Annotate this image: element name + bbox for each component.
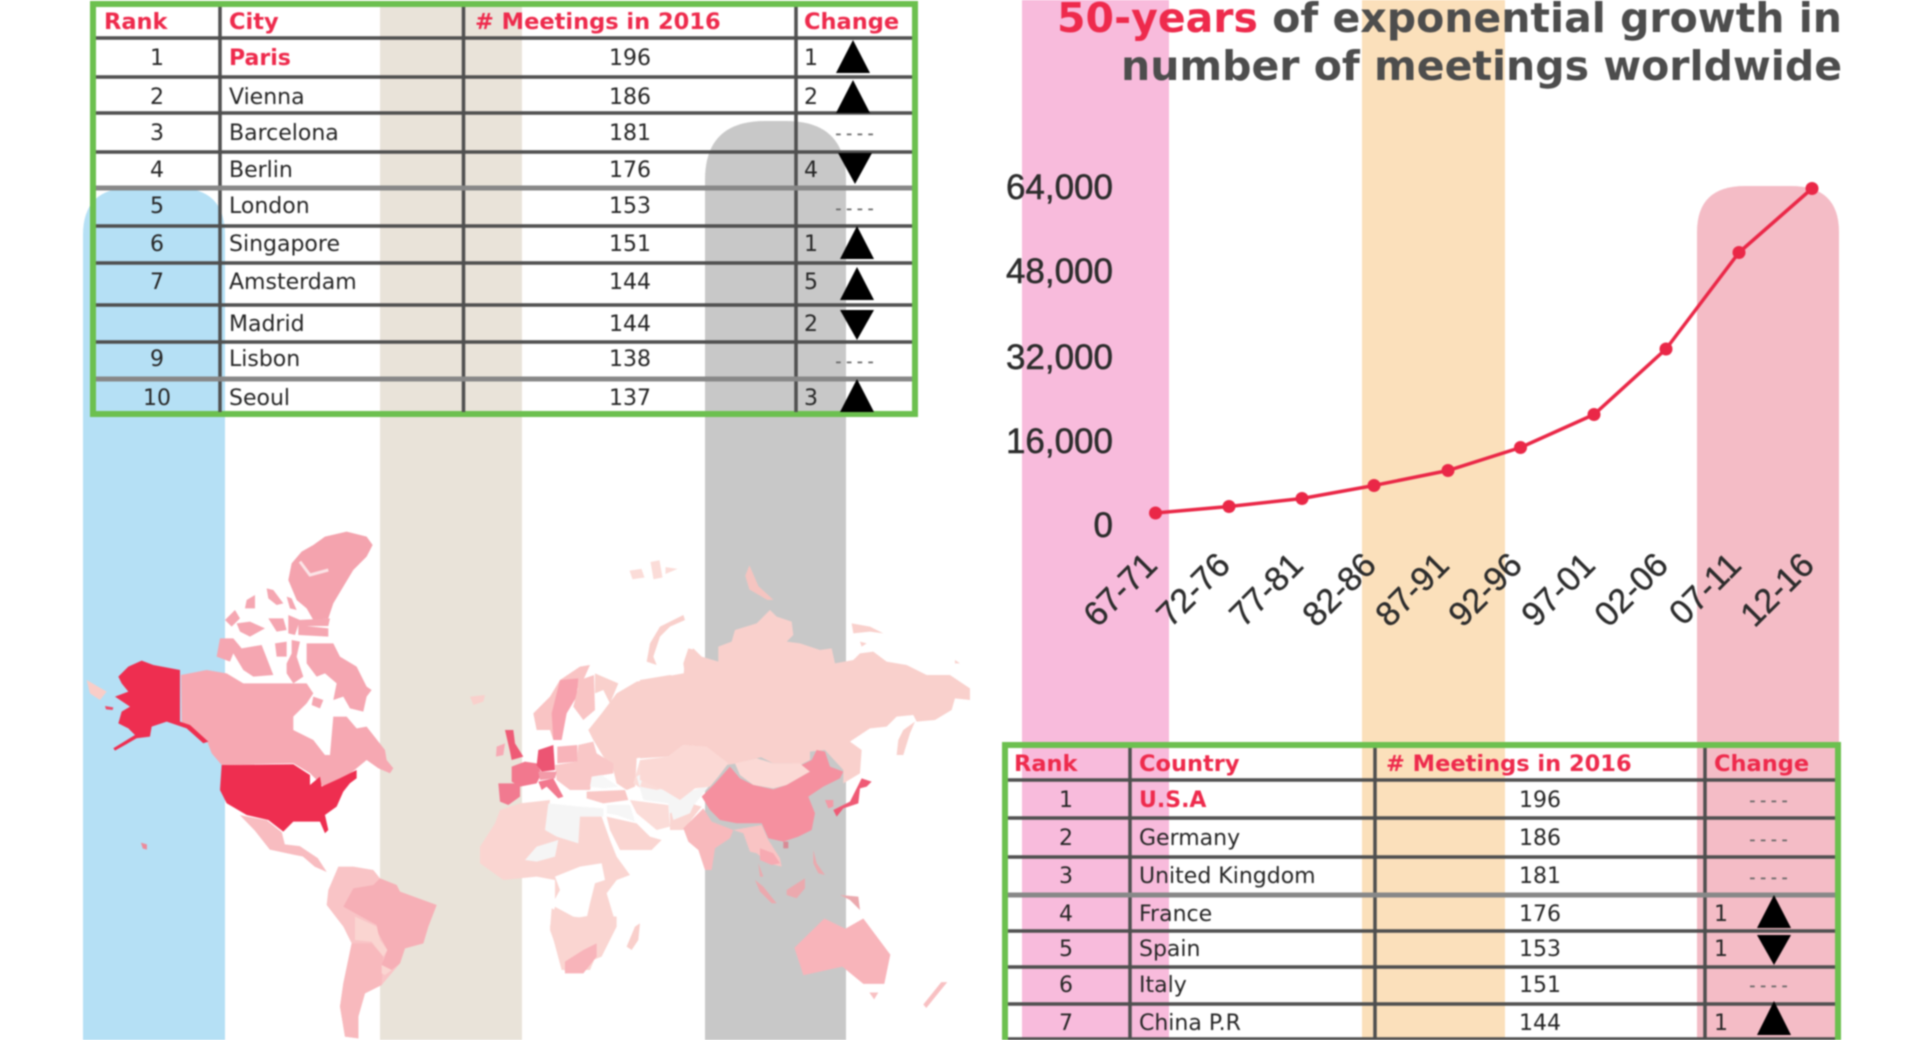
map: Ireland (496, 743, 505, 757)
map: Greenland (288, 532, 373, 620)
map: Canadian arctic islands (217, 588, 372, 712)
rank column: 4 (1059, 902, 1073, 927)
meetings column: 137 (609, 386, 651, 411)
country column: Italy (1139, 973, 1187, 998)
map: Algeria and Libya (545, 803, 603, 843)
change dashes: ---- (1749, 868, 1793, 887)
x axis labels: 02-06 (1587, 546, 1676, 634)
map: Afghanistan no-data (670, 795, 698, 820)
change digits: 1 (1714, 1011, 1728, 1036)
map: Black Sea (590, 775, 618, 788)
city column: Berlin (229, 158, 293, 183)
change digits: 2 (804, 85, 818, 110)
map: Svalbard (630, 560, 677, 579)
map: Spain and Portugal (498, 783, 520, 805)
city column: Singapore (229, 232, 340, 257)
rank column: 1 (1059, 788, 1073, 813)
band: beige (380, 6, 522, 1040)
map: Turkey (587, 790, 628, 803)
map: Iran (630, 800, 670, 830)
map: Japan (833, 778, 872, 817)
y axis labels: 16,000 (1006, 422, 1113, 461)
meetings column: 181 (609, 121, 651, 146)
rank column: 9 (150, 347, 164, 372)
map: Kola (595, 673, 618, 703)
map: China (702, 750, 843, 842)
rank column: 1 (150, 46, 164, 71)
band: blue (83, 188, 225, 1040)
change arrows (1757, 895, 1791, 1035)
city column: Paris (229, 46, 291, 71)
change dashes (835, 124, 879, 371)
change digits: 1 (1714, 902, 1728, 927)
map: Africa (480, 800, 630, 970)
meetings column: 144 (609, 270, 651, 295)
map: USA (220, 764, 357, 833)
chart title: number of meetings worldwide (1121, 42, 1842, 90)
x axis labels: 77-81 (1222, 546, 1311, 634)
change dashes: ---- (835, 352, 879, 371)
city column: Seoul (229, 386, 290, 411)
map: Bering coast (87, 680, 113, 710)
city column: Amsterdam (229, 270, 357, 295)
map: Indonesia and Philippines (755, 850, 860, 910)
map: Caucasus (613, 760, 637, 790)
change digits (804, 46, 818, 411)
change digits: 1 (804, 46, 818, 71)
table grid: lighter row (1008, 892, 1835, 898)
rank column: 2 (150, 85, 164, 110)
map: South Africa (565, 943, 597, 973)
y axis labels (1006, 168, 1113, 545)
x axis labels (1076, 546, 1822, 634)
map: Hawaii (141, 843, 147, 850)
table frame (1005, 745, 1838, 1040)
band: rose (1697, 186, 1839, 1040)
map: Southern Africa (550, 908, 617, 972)
city column (229, 46, 357, 411)
meetings column: 186 (609, 85, 651, 110)
rank column: 7 (150, 270, 164, 295)
rank column (143, 46, 171, 411)
rank column: 5 (150, 194, 164, 219)
rank column: 6 (1059, 973, 1073, 998)
map: Eastern Europe (555, 742, 613, 790)
rank column: 5 (1059, 937, 1073, 962)
map: Asia (640, 610, 970, 910)
meetings column: 153 (1519, 937, 1561, 962)
map: Argentina and Chile (340, 943, 383, 1038)
x axis labels: 92-96 (1441, 546, 1530, 634)
rank column: 10 (143, 386, 171, 411)
map: Central Asia south (633, 760, 670, 790)
x axis labels: 72-76 (1149, 546, 1238, 634)
map: Brazil (343, 878, 437, 970)
map: Iraq and Syria (607, 805, 635, 822)
change digits: 1 (1714, 937, 1728, 962)
rank column: 2 (1059, 826, 1073, 851)
map: Hainan (783, 842, 788, 848)
table header: Rank (104, 9, 169, 35)
map: France (512, 762, 542, 787)
table frame (93, 4, 915, 414)
map: Oceania islands (869, 982, 947, 1008)
city column: Lisbon (229, 347, 300, 372)
table grid (1008, 748, 1835, 1040)
map: Australia (794, 918, 890, 984)
x axis labels: 87-91 (1368, 546, 1457, 634)
map: Italy (538, 778, 563, 798)
meetings column: 153 (609, 194, 651, 219)
map: India (683, 808, 733, 870)
x axis labels: 07-11 (1662, 546, 1749, 632)
x axis labels: 12-16 (1733, 546, 1822, 634)
change digits: 4 (804, 158, 818, 183)
meetings column: 196 (609, 46, 651, 71)
chart title (1057, 0, 1842, 90)
band: pink (1022, 0, 1169, 1040)
table header (1014, 751, 1809, 777)
meetings column: 144 (609, 312, 651, 337)
map: Indochina (733, 825, 782, 867)
table header: Rank (1014, 751, 1079, 777)
country column: United Kingdom (1139, 864, 1316, 889)
country column: China P.R (1139, 1011, 1241, 1036)
map: UK (505, 730, 523, 760)
change dashes (1749, 791, 1793, 995)
change digits: 5 (804, 270, 818, 295)
data line (1156, 188, 1812, 513)
table: top cities (93, 4, 915, 414)
map: Caspian to Pakistan no-data (637, 772, 710, 820)
map: Arctic islands (647, 615, 960, 755)
map: Central Africa gap (552, 863, 605, 918)
map: Alps (538, 772, 557, 780)
table header (104, 9, 899, 35)
table grid: lighter rows (96, 188, 912, 379)
map: Korea (825, 800, 833, 808)
rank column: 4 (150, 158, 164, 183)
map: Franz Josef Land (745, 565, 773, 600)
meetings column: 176 (609, 158, 651, 183)
change dashes: ---- (835, 124, 879, 143)
rank column: 7 (1059, 1011, 1073, 1036)
band: orange (1362, 0, 1505, 1040)
data points (1149, 182, 1818, 520)
table header: City (229, 9, 279, 35)
line chart (1006, 168, 1822, 634)
change digits: 3 (804, 386, 818, 411)
band: gray (705, 121, 846, 1040)
country column (1139, 788, 1316, 1036)
country column: Germany (1139, 826, 1240, 851)
change arrows (836, 40, 874, 412)
map: Europe, Africa, West Asia (470, 650, 810, 970)
city column: Barcelona (229, 121, 339, 146)
map: Russia (640, 610, 970, 783)
city column: Vienna (229, 85, 305, 110)
map: Madagascar (627, 923, 640, 950)
x axis labels: 67-71 (1076, 546, 1165, 634)
change digits: 2 (804, 312, 818, 337)
table header: Change (1714, 751, 1809, 777)
meetings column: 181 (1519, 864, 1561, 889)
table header: Change (804, 9, 899, 35)
change dashes: ---- (1749, 830, 1793, 849)
table header: # Meetings in 2016 (1386, 751, 1632, 777)
map: Russia west (588, 650, 810, 783)
city column: London (229, 194, 310, 219)
map: South America and southern Africa (327, 867, 640, 1038)
y axis labels: 64,000 (1006, 168, 1113, 207)
change dashes: ---- (1749, 976, 1793, 995)
map: Norway (533, 665, 590, 740)
x axis labels: 97-01 (1514, 546, 1603, 634)
map: Mali and Niger (525, 840, 558, 862)
table grid (96, 7, 912, 412)
country column: U.S.A (1139, 788, 1206, 813)
meetings column: 196 (1519, 788, 1561, 813)
map: Mexico and Central America (240, 815, 327, 872)
table header: # Meetings in 2016 (475, 9, 721, 35)
change digits: 1 (804, 232, 818, 257)
country column: Spain (1139, 937, 1200, 962)
world map (87, 532, 970, 1038)
rank column: 6 (150, 232, 164, 257)
map: Iceland (470, 695, 485, 705)
table: top countries (1005, 745, 1838, 1040)
change digits (1714, 902, 1728, 1036)
meetings column: 151 (1519, 973, 1561, 998)
meetings column (1519, 788, 1561, 1036)
map: Finland (573, 675, 595, 720)
change dashes: ---- (835, 199, 879, 218)
map: Mongolia (735, 758, 810, 788)
meetings column: 186 (1519, 826, 1561, 851)
rank column: 3 (150, 121, 164, 146)
map: Germany (537, 745, 555, 772)
map: Saudi Arabia (607, 817, 662, 850)
map: Poland (557, 745, 577, 763)
y axis labels: 48,000 (1006, 252, 1113, 291)
meetings column (609, 46, 651, 411)
y axis labels: 0 (1094, 506, 1113, 545)
map: Pakistan (670, 803, 702, 830)
meetings column: 151 (609, 232, 651, 257)
map: Thailand (760, 848, 780, 865)
map: Greenland fjord (300, 562, 328, 575)
x axis labels: 82-86 (1295, 546, 1384, 634)
meetings column: 138 (609, 347, 651, 372)
change dashes: ---- (1749, 791, 1793, 810)
map: Canada (181, 670, 393, 787)
map: North America (87, 532, 393, 833)
map: South America (327, 867, 437, 1038)
meetings column: 176 (1519, 902, 1561, 927)
map: Bolivia and Paraguay (355, 917, 387, 957)
meetings column: 144 (1519, 1011, 1561, 1036)
country column: France (1139, 902, 1212, 927)
y axis labels: 32,000 (1006, 338, 1113, 377)
map: Central America, Pacific and Oceania (141, 560, 947, 1008)
map: Uruguay (382, 965, 392, 975)
map: Kazakhstan (640, 745, 728, 800)
rank column: 3 (1059, 864, 1073, 889)
rank column (1059, 788, 1073, 1036)
table header: Country (1139, 751, 1240, 777)
map: Sweden (552, 678, 578, 740)
city column: Madrid (229, 312, 305, 337)
map: Alaska (113, 661, 208, 751)
